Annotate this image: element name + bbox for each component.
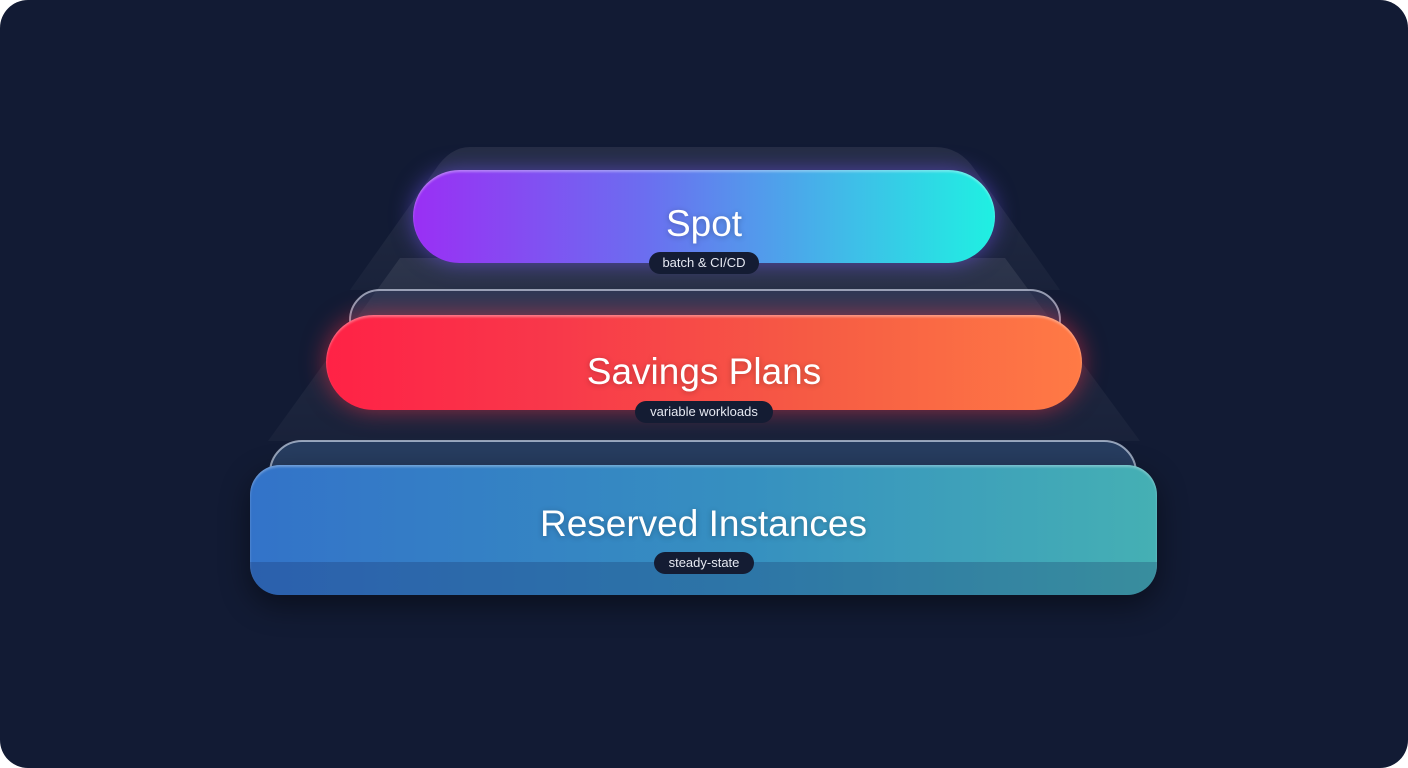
label: batch & CI/CD (649, 252, 759, 274)
tier: Spot (413, 170, 995, 263)
tier: Savings Plans (326, 315, 1082, 410)
tier: Spot: Spot (666, 203, 742, 244)
tier: Reserved Instances: Reserved Instances (540, 503, 867, 544)
label: steady-state (654, 552, 754, 574)
tier: Savings Plans: Savings Plans (587, 351, 821, 392)
tier: Reserved Instances (250, 465, 1157, 595)
label: variable workloads: variable workloads (650, 404, 758, 419)
label: steady-state: steady-state (669, 555, 739, 570)
label: variable workloads (635, 401, 773, 423)
label: batch & CI/CD: batch & CI/CD (662, 255, 746, 270)
